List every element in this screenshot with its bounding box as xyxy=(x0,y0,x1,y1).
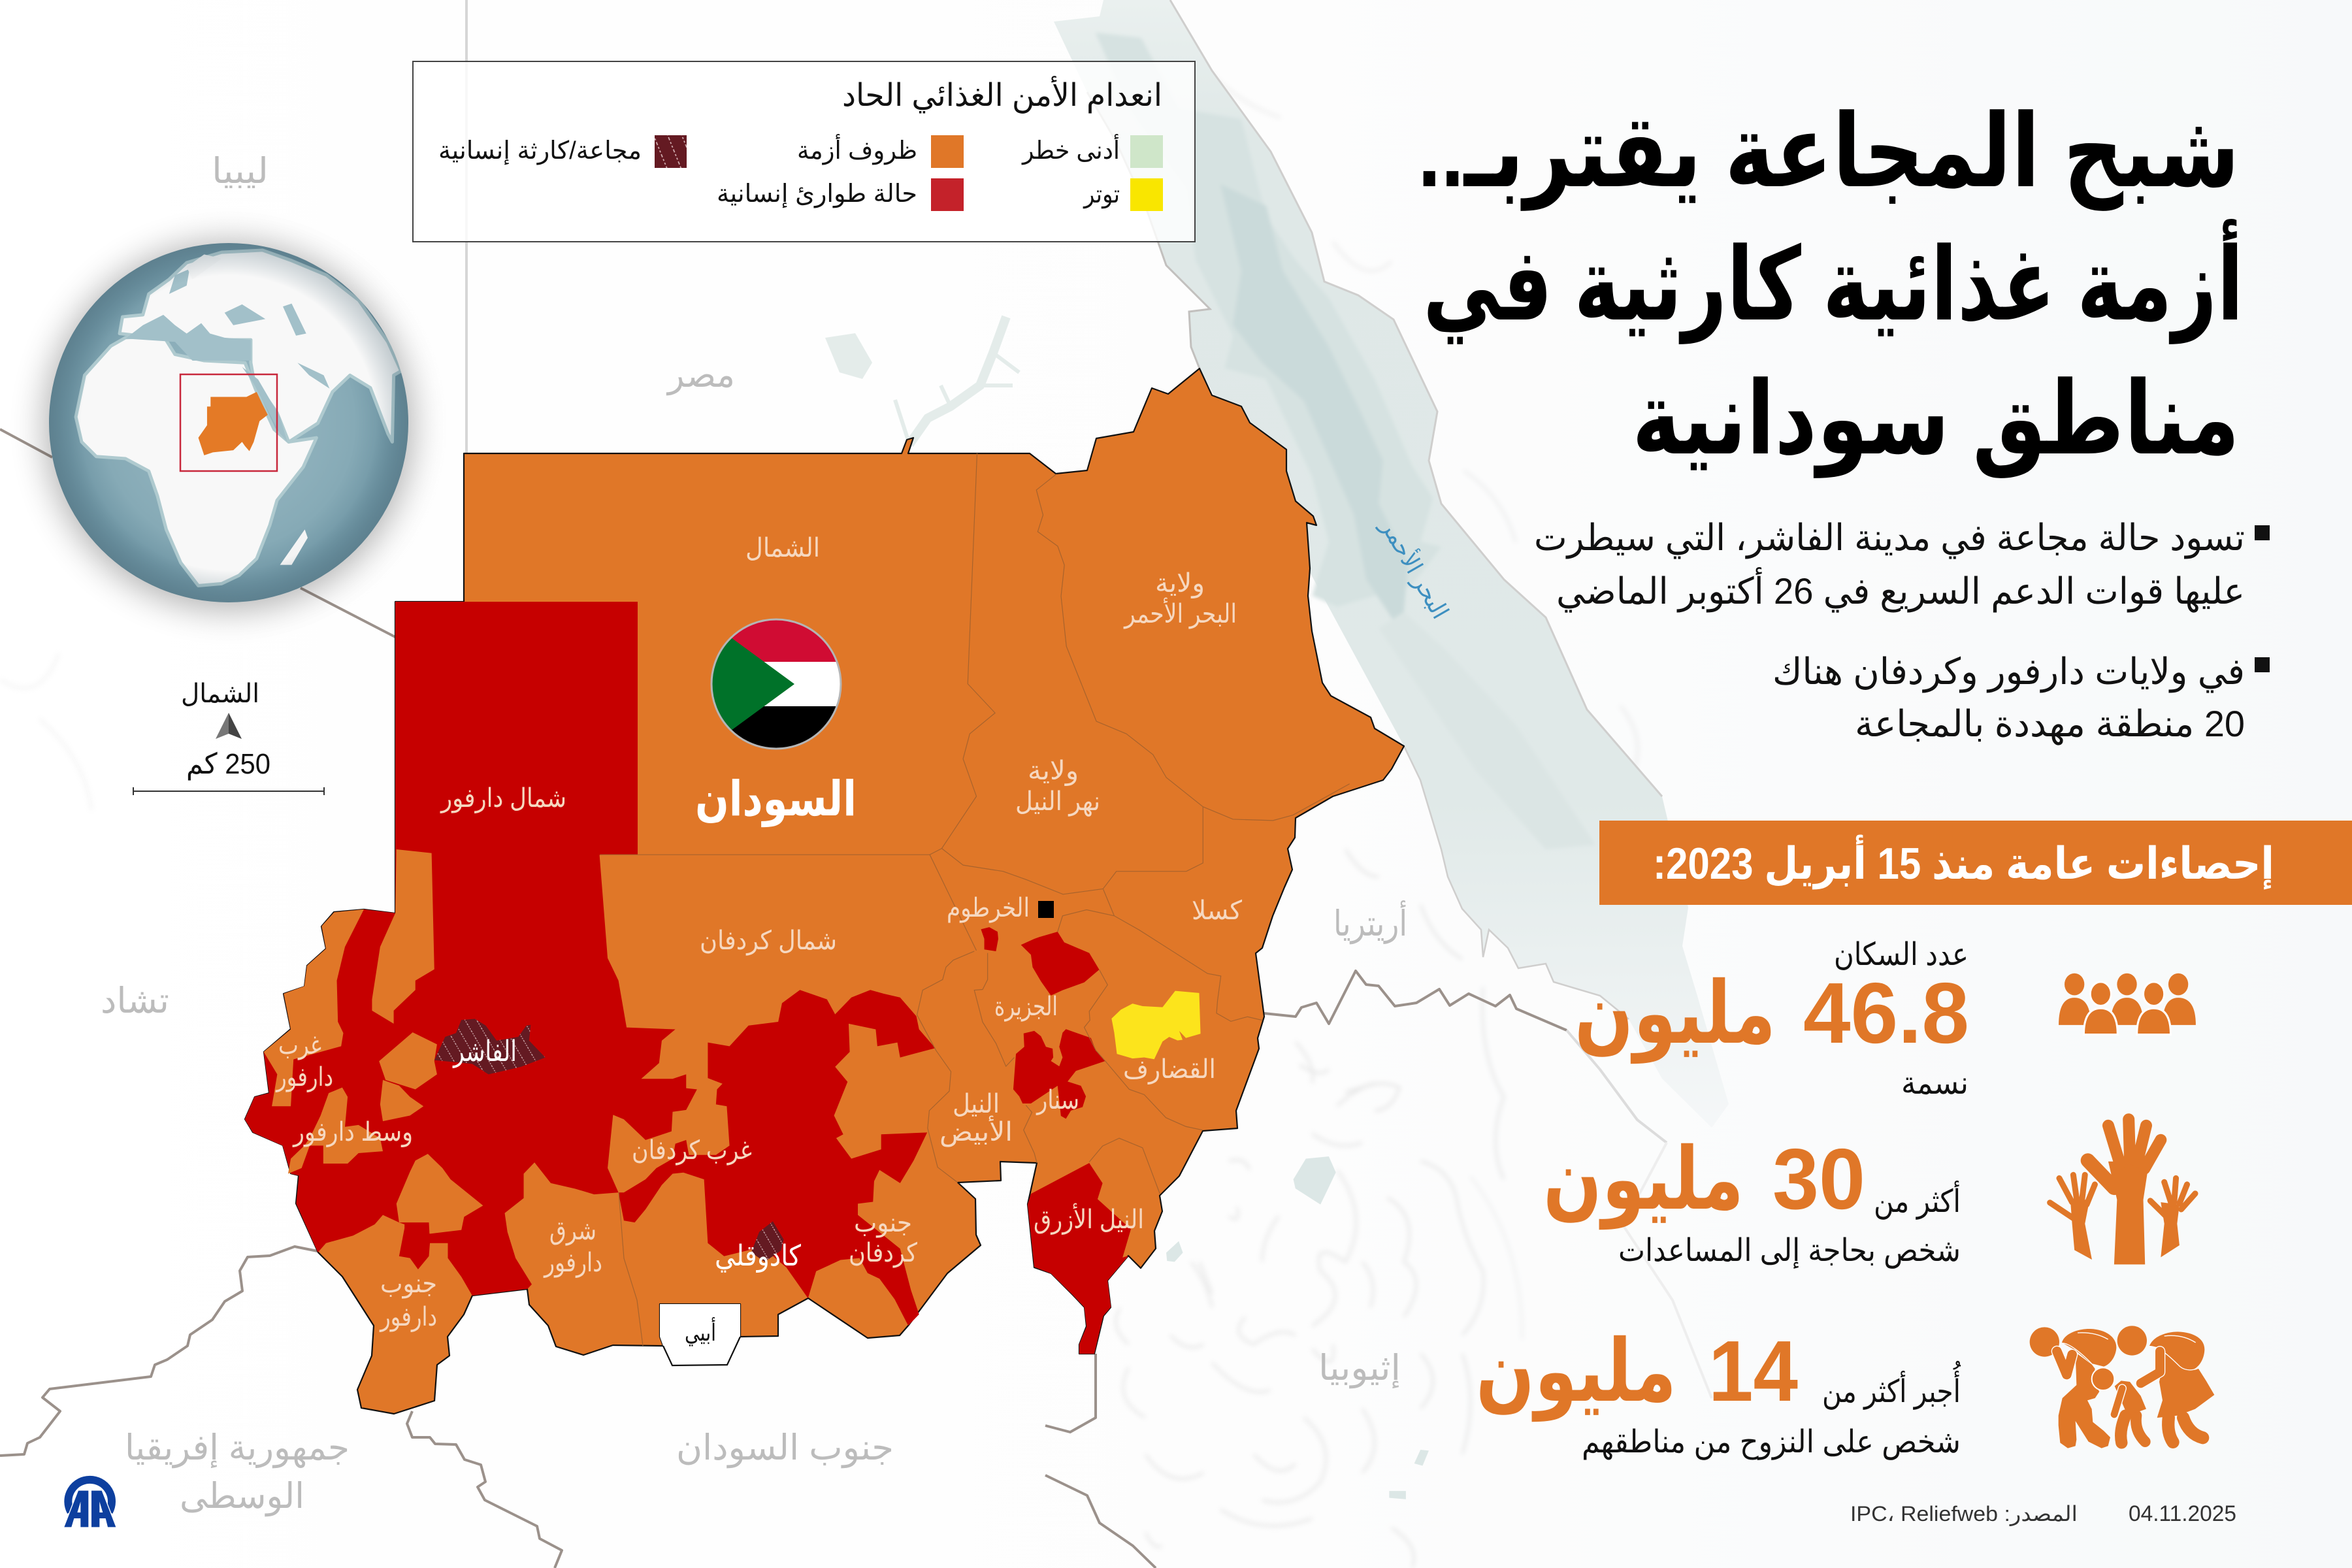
stat: people in need: أكثر من xyxy=(1874,1181,1961,1220)
neighbouring country labels: أريتريا xyxy=(1333,900,1407,944)
locator globe xyxy=(44,242,413,610)
neighbouring country labels: تشاد xyxy=(101,981,169,1021)
stat: population: 46.8 xyxy=(1803,965,1969,1061)
background terrain xyxy=(0,72,1638,1568)
stat: displaced: مليون xyxy=(1476,1323,1676,1422)
legend: حالة طوارئ إنسانية xyxy=(717,180,917,208)
neighbouring country labels: الوسطى xyxy=(180,1477,304,1516)
globe locator box xyxy=(180,374,277,471)
stat: population: مليون xyxy=(1575,965,1776,1064)
state labels: نهر النيل xyxy=(1015,787,1100,817)
neighbouring country labels: جمهورية إفريقيا xyxy=(125,1428,350,1468)
state labels: الجزيرة xyxy=(994,992,1058,1022)
ethiopian lakes xyxy=(1166,1156,1429,1499)
state labels: جنوب xyxy=(854,1209,912,1238)
icon: raised hands xyxy=(2050,1119,2195,1264)
neighbouring country labels: جنوب السودان xyxy=(676,1428,894,1468)
state labels: النيل الأزرق xyxy=(1034,1203,1144,1235)
title xyxy=(1418,95,2244,478)
stats banner: إحصاءات عامة منذ 15 أبريل 2023: xyxy=(1653,834,2274,890)
stat: population: نسمة xyxy=(1901,1066,1968,1101)
neighbouring country labels: إثيوبيا xyxy=(1318,1348,1401,1388)
sudan map xyxy=(245,368,1404,1414)
city labels: كادوقلي xyxy=(715,1240,801,1273)
state labels: ولاية xyxy=(1028,757,1079,786)
north arrow and scale: 250 كم xyxy=(186,748,270,781)
icon: people xyxy=(2059,973,2196,1035)
state labels: شرق xyxy=(549,1217,596,1246)
source and date: المصدر: Reliefweb ‏،‏IPC xyxy=(1850,1502,2078,1526)
state labels: النيل xyxy=(953,1090,1000,1119)
agency logo xyxy=(64,1480,116,1527)
state labels: الشمال xyxy=(745,534,820,563)
neighbouring country labels xyxy=(101,152,1407,1516)
legend: مجاعة/كارثة إنسانية xyxy=(438,137,642,165)
stat: displaced: 14 xyxy=(1708,1323,1798,1419)
north arrow and scale: الشمال xyxy=(181,679,259,708)
state labels: شمال كردفان xyxy=(700,926,837,956)
lake nasser xyxy=(825,317,1019,444)
stat: people in need: مليون xyxy=(1543,1131,1744,1230)
gezira, sennar and blue nile red areas xyxy=(981,927,1201,1354)
sudan flag xyxy=(711,618,841,750)
stats banner xyxy=(1599,821,2352,905)
state labels: سنار xyxy=(1036,1086,1079,1115)
state labels: دارفور xyxy=(275,1063,333,1092)
stat: people in need: شخص بحاجة إلى المساعدات xyxy=(1618,1233,1961,1269)
el fasher and kadugli famine areas xyxy=(434,1019,783,1262)
state labels xyxy=(275,534,1243,1332)
city labels xyxy=(452,1036,801,1347)
stat: displaced: شخص على النزوح من مناطقهم xyxy=(1582,1425,1961,1460)
city labels: الفاشر xyxy=(452,1036,517,1068)
legend: انعدام الأمن الغذائي الحاد xyxy=(842,75,1162,114)
state labels: جنوب xyxy=(380,1269,437,1299)
khartoum marker xyxy=(1038,901,1054,918)
stat: displaced xyxy=(1476,1323,1961,1460)
state labels: دارفور xyxy=(543,1249,602,1278)
stat: population xyxy=(1575,938,1969,1101)
state labels: كسلا xyxy=(1192,896,1243,925)
stat: people in need xyxy=(1543,1131,1961,1269)
state labels: كردفان xyxy=(849,1239,918,1268)
state labels: القضارف xyxy=(1123,1055,1216,1085)
globe sudan xyxy=(199,392,268,455)
bullet text: تسود حالة مجاعة في مدينة الفاشر، التي سيطرت xyxy=(1534,517,2245,559)
legend xyxy=(413,61,1195,242)
neighbouring country labels: ليبيا xyxy=(212,152,269,191)
icon: displaced family xyxy=(2030,1326,2214,1448)
red sea xyxy=(1054,0,1729,1128)
north darfur red block xyxy=(395,602,638,855)
state labels: غرب xyxy=(278,1031,321,1060)
source and date: 04.11.2025 xyxy=(2129,1501,2236,1526)
legend: توتر xyxy=(1083,181,1120,209)
state labels: غرب كردفان xyxy=(632,1136,752,1166)
internal state borders xyxy=(600,453,1350,1346)
legend: ظروف أزمة xyxy=(797,134,917,165)
city labels: أبيي xyxy=(685,1317,716,1347)
darfur and kordofan red areas xyxy=(245,849,936,1326)
state labels: البحر الأحمر xyxy=(1123,597,1237,629)
red sea label: البحر الأحمر xyxy=(1375,513,1455,623)
bullet text xyxy=(1534,517,2270,745)
source and date xyxy=(1850,1501,2236,1526)
state labels: وسط دارفور xyxy=(292,1118,413,1147)
sudan base shape xyxy=(245,368,1404,1414)
state labels: الأبيض xyxy=(939,1115,1013,1147)
stat: displaced: أُجبر أكثر من xyxy=(1822,1361,1961,1410)
state labels: الخرطوم xyxy=(947,894,1030,923)
neighbouring country labels: مصر xyxy=(666,355,735,395)
country borders xyxy=(0,0,1712,1568)
state labels: شمال دارفور xyxy=(440,784,566,813)
stat: population: عدد السكان xyxy=(1834,938,1968,972)
state labels: ولاية xyxy=(1155,569,1205,598)
abyei xyxy=(660,1304,740,1365)
legend: أدنى خطر xyxy=(1021,134,1120,165)
bullet text: في ولايات دارفور وكردفان هناك xyxy=(1772,651,2245,693)
yellow stressed area xyxy=(1111,991,1201,1059)
sudan label: السودان xyxy=(695,772,857,828)
bullet text: عليها قوات الدعم السريع في 26 أكتوبر الماضي xyxy=(1556,567,2245,613)
north arrow and scale xyxy=(133,679,324,795)
bullet text: 20 منطقة مهددة بالمجاعة xyxy=(1855,703,2245,745)
state labels: دارفور xyxy=(379,1303,437,1332)
stat: people in need: 30 xyxy=(1772,1131,1865,1227)
